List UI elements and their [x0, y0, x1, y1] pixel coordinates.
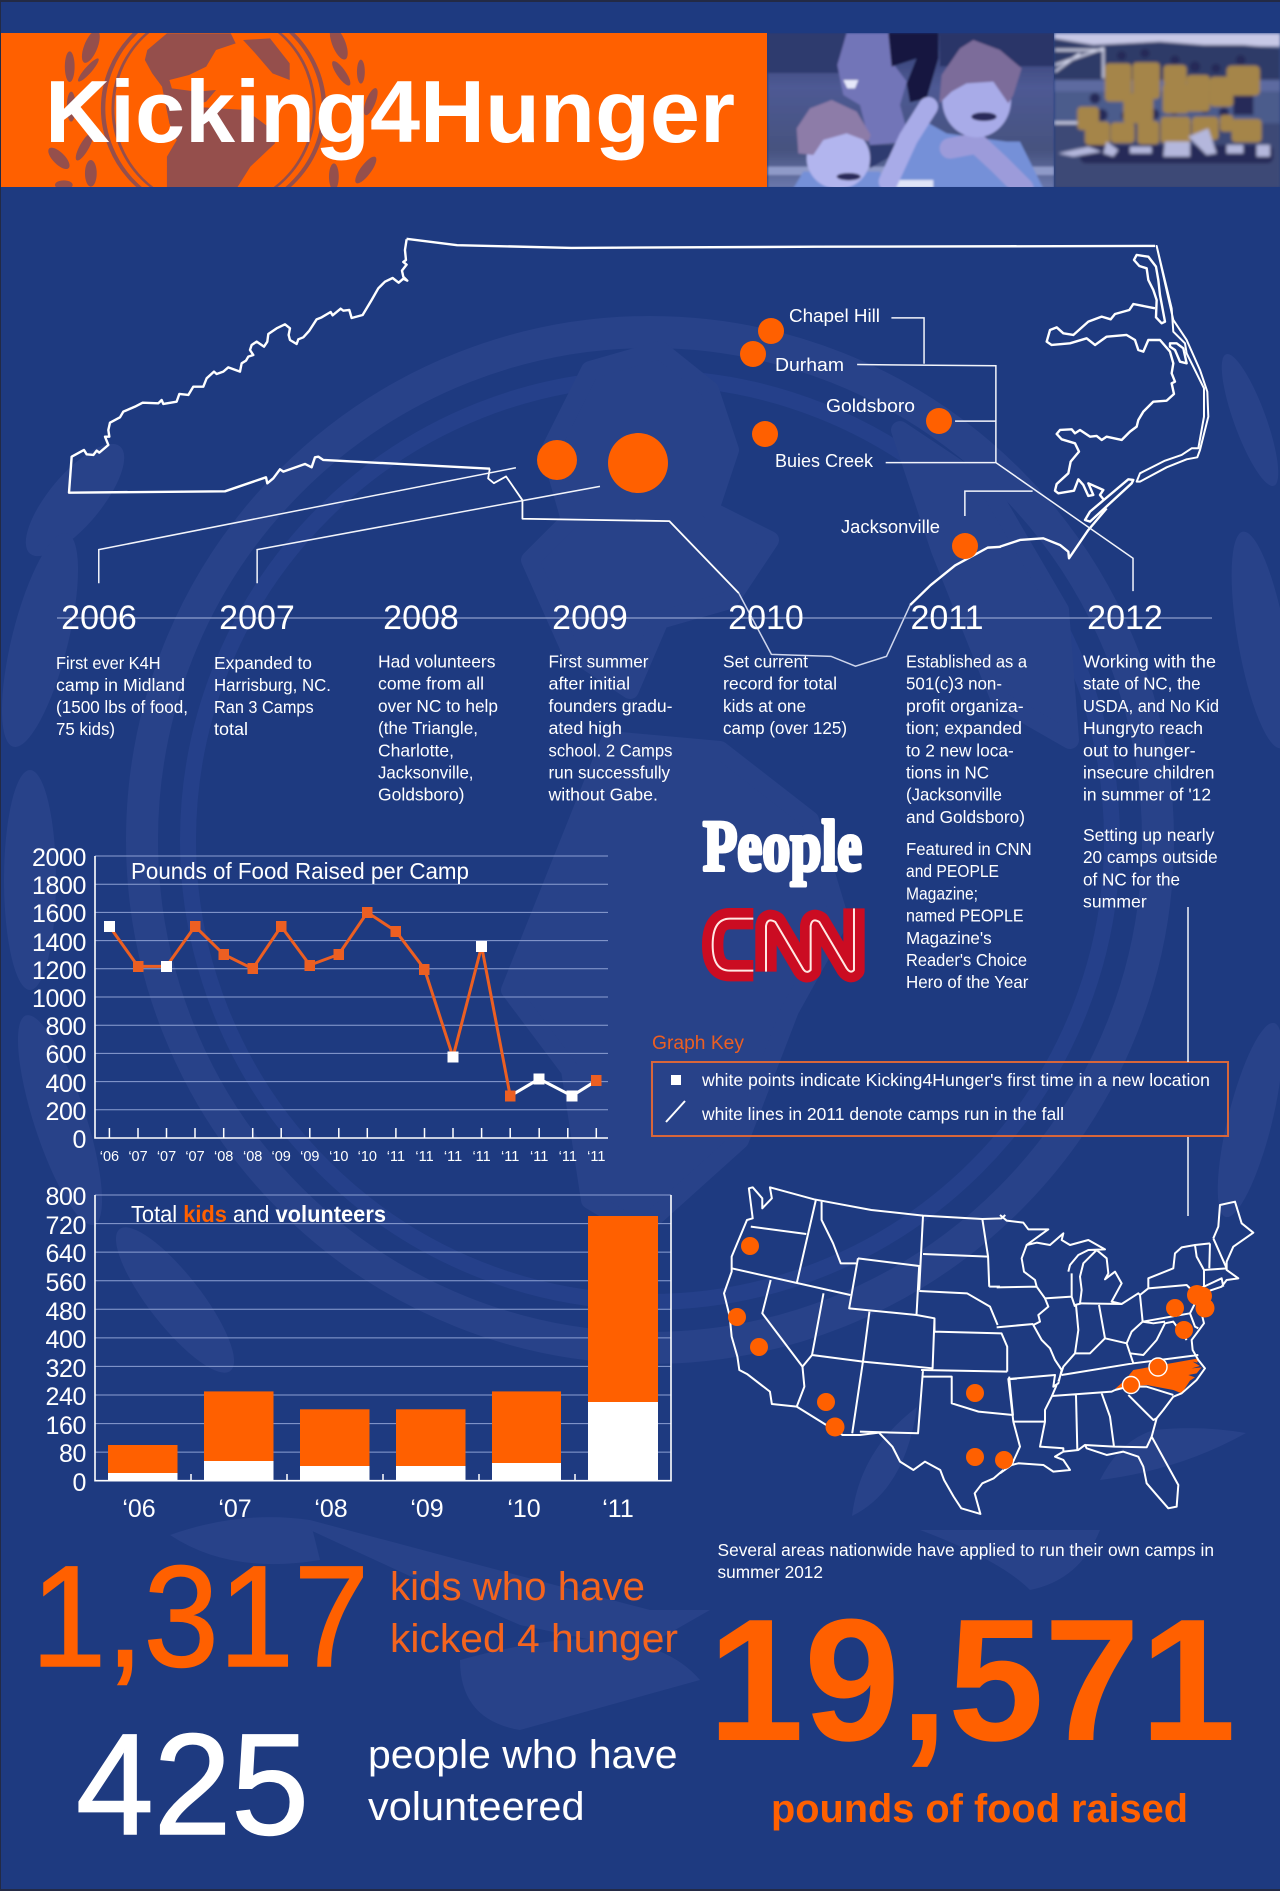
timeline — [56, 599, 1219, 992]
graph key: Graph Key — [652, 1033, 745, 1054]
x axis labels — [122, 1495, 634, 1523]
graph key — [652, 1033, 1228, 1136]
city labels: Goldsboro — [826, 395, 915, 416]
western states — [724, 1187, 1017, 1514]
People magazine logo: People — [703, 806, 862, 886]
x axis labels: ‘10 — [329, 1149, 348, 1165]
y axis labels: 1800 — [32, 872, 86, 900]
orange bars: kids — [108, 1216, 658, 1473]
NC outline: western border — [69, 239, 490, 493]
text: 2009: after initial — [548, 674, 630, 694]
text: 2011: and Goldsboro) — [906, 807, 1025, 827]
x axis labels: ‘08 — [214, 1149, 233, 1165]
text: 2008 — [378, 652, 498, 805]
text: 2009: founders gradu- — [548, 696, 673, 716]
y axis labels: 1200 — [32, 957, 86, 985]
y axis labels: 80 — [59, 1440, 86, 1468]
x axis labels: ‘09 — [410, 1495, 444, 1523]
text: 2012 plans — [1083, 825, 1218, 912]
camp dots — [728, 1237, 1214, 1469]
text: 2011 press: Magazine's — [906, 928, 992, 948]
text: 2008: Charlotte, — [378, 740, 454, 760]
text: 2011: to 2 new loca- — [906, 740, 1014, 760]
y axis labels — [32, 844, 86, 1154]
text: 2008: Goldsboro) — [378, 785, 464, 805]
text: 2012 plans: summer — [1083, 892, 1147, 912]
text: 2006: camp in Midland — [56, 675, 185, 695]
year labels: 2012 — [1087, 599, 1163, 637]
stat: kids: kids who have — [390, 1565, 645, 1609]
North Carolina map with camp locations — [69, 239, 1208, 666]
text: 2007 — [214, 653, 331, 739]
text: 2010 — [723, 652, 847, 738]
text: 2012: in summer of '12 — [1083, 785, 1211, 805]
x axis labels: ‘08 — [243, 1149, 262, 1165]
text: 2012 plans: of NC for the — [1083, 869, 1180, 889]
x axis labels: ‘11 — [602, 1495, 634, 1523]
stat: volunteers: 425 — [76, 1704, 309, 1865]
year labels — [61, 599, 1163, 637]
y axis labels: 1000 — [32, 985, 86, 1013]
text: 2007: Expanded to — [214, 653, 312, 673]
y axis labels — [45, 1183, 86, 1497]
city labels: Buies Creek — [775, 450, 874, 471]
text: 2012: out to hunger- — [1083, 740, 1196, 760]
x axis labels: ‘11 — [587, 1149, 605, 1165]
text: 2008: over NC to help — [378, 696, 498, 716]
x axis labels: ‘07 — [128, 1149, 148, 1165]
x axis labels: ‘10 — [507, 1495, 541, 1523]
text: 2008: Jacksonville, — [378, 762, 474, 782]
note: nationwide applications: Several areas nationwide have applied to run their own camps in — [718, 1540, 1214, 1560]
text: 2011 — [906, 652, 1027, 827]
text: 2010: camp (over 125) — [723, 718, 847, 738]
y axis labels: 200 — [45, 1098, 86, 1126]
text: 2011 press: Magazine; — [906, 883, 978, 903]
graph key: white lines in 2011 denote camps run in the fall — [701, 1104, 1064, 1124]
stat: kids — [31, 1536, 678, 1697]
orange title panel — [1, 33, 767, 187]
chart title: Total kids and volunteers — [131, 1201, 386, 1227]
photo: camp team — [1054, 33, 1280, 188]
location dots — [537, 318, 978, 559]
x axis labels: ‘11 — [472, 1149, 491, 1165]
y axis labels: 400 — [45, 1070, 86, 1098]
city labels: Durham — [775, 354, 844, 375]
y axis labels: 560 — [45, 1269, 86, 1297]
y axis labels: 160 — [45, 1412, 86, 1440]
line chart: pounds of food raised per camp — [32, 844, 608, 1165]
x axis labels: ‘11 — [501, 1149, 519, 1165]
year labels: 2011 — [910, 599, 984, 637]
x axis labels: ‘07 — [157, 1149, 176, 1165]
x axis labels: ‘11 — [415, 1149, 434, 1165]
text: 2011 press: Featured in CNN — [906, 839, 1032, 859]
text: 2006: First ever K4H — [56, 653, 160, 673]
stat: volunteers: volunteered — [368, 1785, 584, 1829]
timeline leader lines — [99, 318, 1133, 591]
text: 2011: tions in NC — [906, 762, 989, 782]
y axis labels: 800 — [45, 1183, 86, 1211]
text: 2009: without Gabe. — [547, 785, 658, 805]
y axis labels: 400 — [45, 1326, 86, 1354]
NC outline: northern and southern borders — [407, 239, 1155, 666]
text: 2008: come from all — [378, 674, 484, 694]
US map with camp locations — [724, 1187, 1253, 1514]
text: 2009: ated high — [548, 718, 622, 738]
y axis labels: 240 — [45, 1383, 86, 1411]
stat: kids: 1,317 — [31, 1536, 369, 1697]
chart title: Pounds of Food Raised per Camp — [131, 858, 469, 884]
x axis labels: ‘11 — [530, 1149, 548, 1165]
y axis labels: 320 — [45, 1355, 86, 1383]
stat: kids: kicked 4 hunger — [390, 1617, 678, 1661]
year labels: 2009 — [552, 599, 628, 637]
NC outline: Atlantic coast — [1000, 246, 1208, 558]
text: 2008: Had volunteers — [378, 652, 496, 672]
x axis labels: ‘07 — [185, 1149, 205, 1165]
x axis labels: ‘09 — [272, 1149, 291, 1165]
x axis labels — [100, 1149, 605, 1165]
text: 2012: insecure children — [1083, 762, 1214, 782]
text: 2011 press: and PEOPLE — [906, 861, 999, 881]
y axis labels: 1600 — [32, 900, 86, 928]
y axis labels: 0 — [72, 1126, 86, 1154]
y axis labels: 600 — [45, 1041, 86, 1069]
CNN logo — [713, 908, 854, 972]
background watermark: globe and laurel — [0, 332, 1280, 1730]
stat: volunteers — [76, 1704, 678, 1865]
NC highlighted — [1115, 1358, 1202, 1393]
photo: founder with two kids — [768, 33, 1054, 189]
text: 2011 press: named PEOPLE — [906, 906, 1024, 926]
x axis labels: ‘11 — [559, 1149, 577, 1165]
text: 2011: (Jacksonville — [906, 785, 1002, 805]
text: 2011: Established as a — [906, 652, 1027, 672]
y axis labels: 640 — [45, 1240, 86, 1268]
text: 2010: record for total — [723, 674, 837, 694]
year labels: 2007 — [219, 599, 295, 637]
text: 2010: kids at one — [723, 696, 806, 716]
text: 2007: total — [214, 719, 248, 739]
text: 2009: run successfully — [548, 762, 670, 782]
text: 2012: state of NC, the — [1083, 674, 1201, 694]
text: 2009: First summer — [548, 652, 649, 672]
x axis labels: ‘11 — [387, 1149, 405, 1165]
text: 2011: 501(c)3 non- — [906, 674, 1002, 694]
header banner — [1, 33, 1280, 187]
connector from 2012 to US map — [1187, 907, 1189, 1216]
note: nationwide applications — [718, 1540, 1214, 1582]
stat: pounds of food: pounds of food raised — [771, 1787, 1188, 1831]
note: nationwide applications: summer 2012 — [718, 1562, 823, 1582]
year labels: 2008 — [383, 599, 459, 637]
year labels: 2010 — [728, 599, 804, 637]
text: 2007: Harrisburg, NC. — [214, 675, 331, 695]
city labels: Jacksonville — [841, 516, 940, 537]
text: 2006 — [56, 653, 188, 739]
y axis labels: 800 — [45, 1013, 86, 1041]
x axis labels: ‘08 — [314, 1495, 348, 1523]
y axis labels: 2000 — [32, 844, 86, 872]
city labels: Chapel Hill — [789, 305, 880, 326]
x axis labels: ‘07 — [218, 1495, 252, 1523]
text: 2012 plans: 20 camps outside — [1083, 847, 1218, 867]
stat: volunteers: people who have — [368, 1733, 678, 1777]
text: 2012 — [1083, 652, 1219, 805]
text: 2009 — [547, 652, 673, 805]
text: 2011 press: Hero of the Year — [906, 972, 1029, 992]
text: 2007: Ran 3 Camps — [214, 697, 314, 717]
data line — [104, 907, 602, 1102]
white bars: volunteers — [108, 1402, 658, 1481]
bar chart: total kids and volunteers — [45, 1183, 671, 1523]
text: 2006: 75 kids) — [56, 719, 115, 739]
text: 2011 press: Reader's Choice — [906, 950, 1027, 970]
text: 2012 plans: Setting up nearly — [1083, 825, 1215, 845]
title: Kicking4Hunger — [45, 62, 735, 161]
eastern states — [997, 1202, 1253, 1508]
graph key: white points indicate Kicking4Hunger's first time in a new location — [701, 1070, 1210, 1090]
logo: globe and wreath — [48, 33, 378, 187]
text: 2008: (the Triangle, — [378, 718, 478, 738]
text: 2012: USDA, and No Kid — [1083, 696, 1219, 716]
text: 2006: (1500 lbs of food, — [56, 697, 188, 717]
text: 2011: tion; expanded — [906, 718, 1022, 738]
text: 2010: Set current — [723, 652, 808, 672]
y axis labels: 720 — [45, 1212, 86, 1240]
x axis labels: ‘10 — [358, 1149, 377, 1165]
x axis labels: ‘11 — [444, 1149, 462, 1165]
y axis labels: 480 — [45, 1298, 86, 1326]
stat: pounds of food: 19,571 — [708, 1582, 1236, 1777]
x axis labels: ‘06 — [100, 1149, 119, 1165]
y axis labels: 1400 — [32, 929, 86, 957]
text: 2009: school. 2 Camps — [548, 740, 673, 760]
text: 2011: profit organiza- — [906, 696, 1024, 716]
text: 2011 press — [906, 839, 1032, 992]
year labels: 2006 — [61, 599, 137, 637]
x axis labels: ‘06 — [122, 1495, 156, 1523]
y axis labels: 0 — [72, 1469, 86, 1497]
text: 2012: Working with the — [1083, 652, 1216, 672]
text: 2012: Hungryto reach — [1083, 718, 1203, 738]
city labels — [775, 305, 940, 537]
x axis labels: ‘09 — [300, 1149, 319, 1165]
